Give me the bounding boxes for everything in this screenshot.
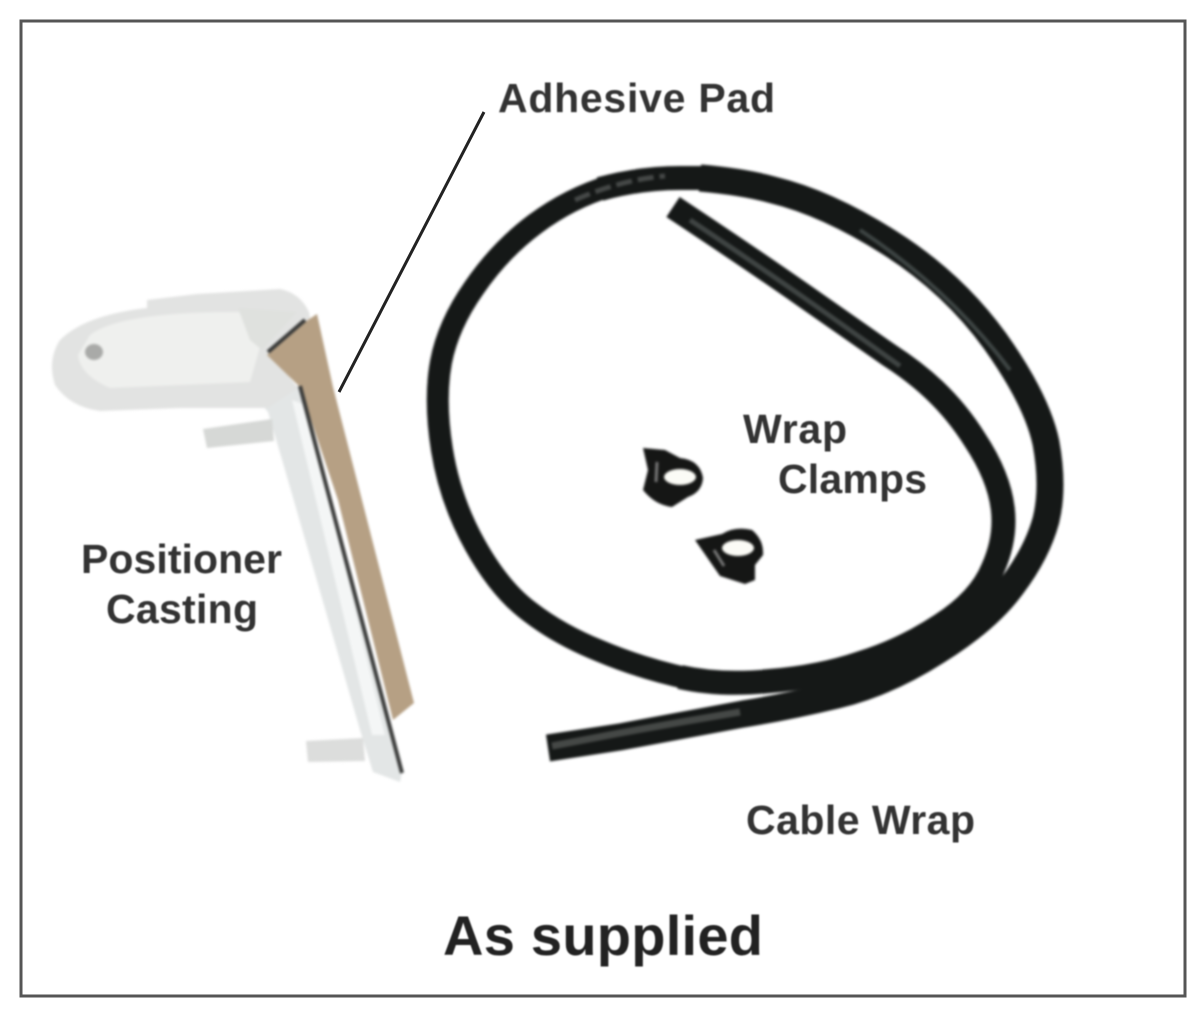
lower tail and outer band bbox=[548, 178, 1050, 748]
left loop bbox=[438, 186, 690, 679]
wrap clamps bbox=[643, 448, 763, 584]
adhesive pad bbox=[267, 314, 414, 720]
label: wrap clamps: Clamps bbox=[778, 456, 927, 502]
top transition bbox=[600, 178, 710, 189]
mounting hole bbox=[85, 344, 103, 360]
label: positioner casting: Positioner bbox=[81, 536, 282, 582]
label: cable wrap: Cable Wrap bbox=[746, 797, 975, 843]
casting head bbox=[52, 289, 312, 411]
positioner casting part bbox=[52, 289, 414, 782]
dark seam bbox=[268, 320, 402, 773]
label: positioner casting: Casting bbox=[106, 586, 258, 632]
cable wrap bbox=[438, 176, 1050, 748]
label: adhesive pad: Adhesive Pad bbox=[498, 75, 775, 121]
label: positioner casting bbox=[81, 536, 282, 632]
tube highlights bbox=[690, 220, 900, 366]
casting arm bbox=[262, 385, 402, 782]
adhesive pad leader line bbox=[339, 112, 484, 392]
inner band bbox=[673, 207, 1004, 683]
lower tab bbox=[306, 738, 365, 762]
clamp two bbox=[695, 529, 763, 584]
upper tab bbox=[203, 419, 274, 448]
label: wrap clamps: Wrap bbox=[743, 406, 847, 452]
label: wrap clamps bbox=[743, 406, 927, 502]
caption: As supplied bbox=[443, 904, 763, 967]
clamp one bbox=[643, 448, 703, 507]
